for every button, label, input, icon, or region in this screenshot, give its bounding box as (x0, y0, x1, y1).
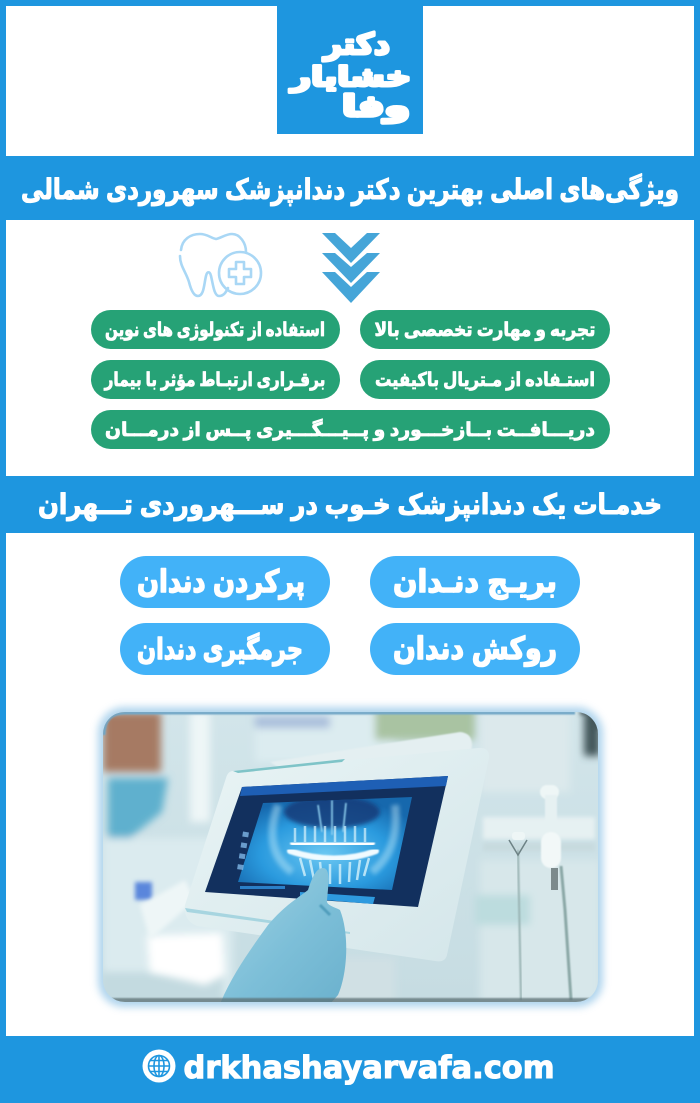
pill: filling: پرکردن دندان (137, 564, 305, 600)
gloved hand (220, 868, 346, 1004)
website address: drkhashayarvafa.com (184, 1050, 554, 1086)
heading band: services (0, 476, 700, 533)
arrow: triple chevron down (322, 233, 380, 303)
monitor rear (272, 731, 472, 766)
logo: وفا (342, 89, 410, 123)
icon: tooth with plus (180, 234, 261, 296)
pill: technology: استفاده از تکنولوژی های نوین (105, 319, 325, 341)
background blurs (103, 708, 600, 1004)
pill: crown: روکش دندان (393, 631, 557, 667)
pill: filling (120, 556, 330, 608)
photo: dentist using x-ray touchscreen (98, 707, 603, 1007)
pill: experience: تجربه و مهارت تخصصی بالا (374, 319, 596, 341)
pill: materials (360, 360, 610, 399)
heading band: features (0, 156, 700, 220)
pill: follow-up (91, 410, 610, 449)
pill: bridge: بریـج دنـدان (393, 564, 557, 600)
pill: communication (91, 360, 340, 399)
pill: technology (91, 310, 340, 349)
pill: experience (360, 310, 610, 349)
icon: globe (142, 1050, 176, 1082)
logo: دکتر (322, 27, 390, 61)
footer band (0, 1036, 700, 1103)
pill: scaling: جرمگیری دندان (137, 632, 303, 666)
logo (277, 0, 423, 134)
feature pills (91, 310, 610, 449)
edge shading (580, 712, 598, 730)
monitor bezel (185, 748, 489, 961)
pill: materials: استـفاده از مـتریال باکیفیت (375, 369, 595, 391)
service pills (120, 556, 580, 675)
pill: crown (370, 623, 580, 675)
logo: خشایار (288, 62, 411, 93)
pill: scaling (120, 623, 330, 675)
pill: communication: برقـراری ارتبـاط مؤثر با بیمار (104, 369, 326, 391)
x-ray screen (205, 776, 448, 907)
pill: follow-up: دریـــافــت بــازخـــورد و پــیـــگـــیری پــس از درمـــان (105, 418, 595, 441)
pill: bridge (370, 556, 580, 608)
dental unit (483, 817, 595, 839)
